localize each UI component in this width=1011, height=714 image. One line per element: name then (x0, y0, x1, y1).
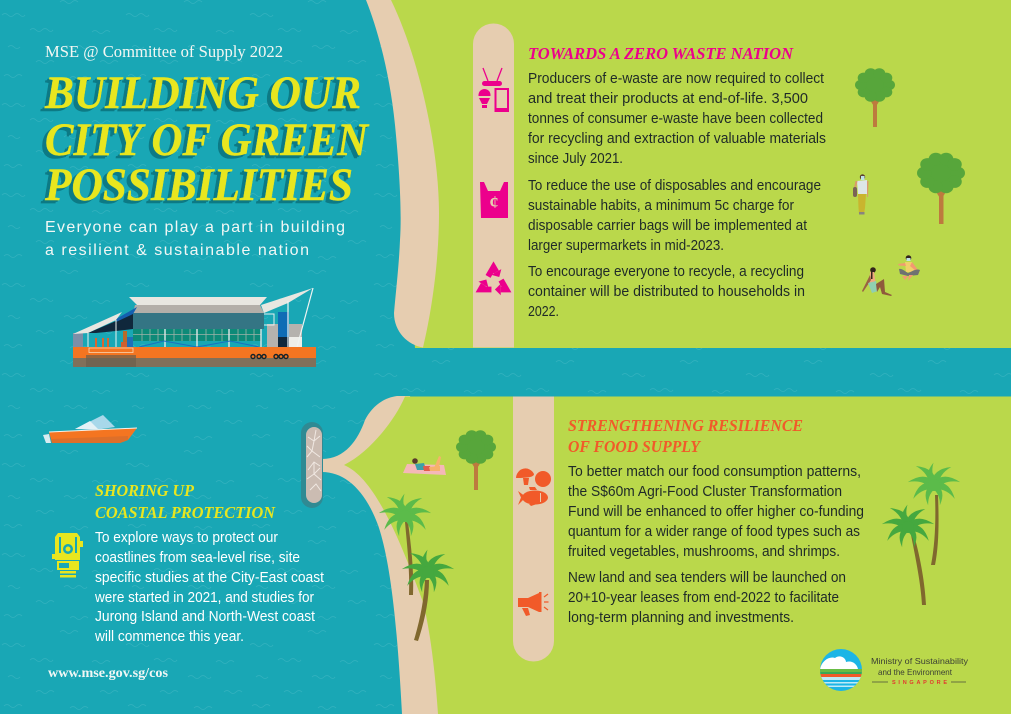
title: POSSIBILITIES (40, 162, 349, 214)
zero waste text: e-waste: since July 2021. (528, 150, 623, 167)
ministry logo: Ministry of Sustainability (871, 656, 969, 666)
bottom land (344, 396, 1011, 714)
title: CITY OF GREEN (45, 114, 370, 166)
illustration: palm tree right back (908, 460, 960, 565)
section: zero waste nation (477, 44, 965, 320)
zero waste text: recycling: To encourage everyone to recycle, a recycling (528, 263, 804, 280)
subtitle: Everyone can play a part in building (45, 219, 345, 236)
title: CITY OF GREEN (41, 117, 366, 169)
icon: megaphone (518, 592, 548, 616)
zero waste text: e-waste: tonnes of consumer e-waste have been collected (528, 110, 823, 127)
illustration: beach tree (456, 430, 496, 490)
icon: carrier bag with cent sign (480, 182, 508, 218)
title: BUILDING OUR (40, 70, 357, 122)
icon: mushroom, tomato and fish (516, 468, 551, 506)
icon: surveying instrument (52, 533, 83, 578)
subtitle (45, 219, 345, 259)
zero waste text: e-waste: Producers of e-waste are now required to collect (528, 70, 825, 87)
coastal protection text: will commence this year. (94, 628, 244, 645)
icon: carrier bag with cent sign: ¢ (490, 192, 498, 212)
top footpath (473, 23, 514, 347)
coastal protection heading: COASTAL PROTECTION (95, 503, 276, 522)
coastal protection text (94, 529, 325, 645)
coastal protection text: To explore ways to protect our (95, 529, 278, 546)
title: POSSIBILITIES (44, 159, 353, 211)
food supply text: funding: fruited vegetables, mushrooms, and shrimps. (568, 543, 840, 560)
ministry logo (820, 649, 969, 691)
zero waste heading: TOWARDS A ZERO WASTE NATION (528, 44, 794, 63)
coastal protection text: specific studies at the City-East coast (95, 569, 325, 586)
coastal protection heading (95, 481, 276, 522)
illustration: seated man (898, 255, 920, 281)
coastal protection text: were started in 2021, and studies for (94, 589, 314, 606)
food supply text: funding: the S$60m Agri-Food Cluster Transformation (568, 483, 842, 500)
zero waste text: carrier bags: disposable carrier bags will be implemented at (528, 217, 808, 234)
website link: www.mse.gov.sg/cos (48, 666, 169, 681)
zero waste text: e-waste: and treat their products at end-of-life. 3,500 (528, 90, 808, 107)
top land (385, 0, 1011, 348)
zero waste text: carrier bags: sustainable habits, a minimum 5c charge for (528, 197, 794, 214)
illustration: seated woman (862, 267, 892, 296)
boat (43, 415, 137, 443)
illustration: palm tree right front (882, 502, 934, 605)
bottom beach with breakwater spit (322, 396, 450, 714)
zero waste text: recycling: container will be distributed to households in (528, 283, 805, 300)
title: CITY OF GREEN (43, 116, 368, 168)
food supply text: tenders: long-term planning and investments. (568, 609, 794, 626)
title (40, 67, 370, 214)
food supply heading: STRENGTHENING RESILIENCE (568, 416, 803, 435)
floating building illustration (73, 288, 316, 367)
zero waste text: carrier bags: larger supermarkets in mid-2023. (528, 237, 724, 254)
food supply text: tenders: New land and sea tenders will be launched on (568, 569, 846, 586)
zero waste text: carrier bags (528, 177, 821, 254)
section: coastal protection (52, 481, 325, 645)
icon: e-waste devices (478, 68, 509, 112)
top beach (366, 0, 439, 348)
section: food supply resilience (379, 416, 960, 641)
food supply text: funding: Fund will be enhanced to offer higher co-funding (568, 503, 864, 520)
food supply text: tenders (568, 569, 846, 626)
food supply heading (568, 416, 803, 456)
food supply text: funding: To better match our food consumption patterns, (568, 463, 861, 480)
food supply text: funding (568, 463, 864, 560)
title: BUILDING OUR (42, 68, 359, 120)
ministry logo: and the Environment (878, 667, 953, 677)
title: BUILDING OUR (44, 67, 361, 119)
coastal protection heading: SHORING UP (95, 481, 195, 500)
zero waste text: recycling (528, 263, 805, 320)
illustration: palm tree left (379, 491, 431, 595)
ministry logo: SINGAPORE (892, 680, 947, 686)
coastal protection text: Jurong Island and North-West coast (95, 608, 316, 625)
event label: MSE @ Committee of Supply 2022 (45, 42, 283, 61)
zero waste text: e-waste (528, 70, 826, 167)
zero waste text: carrier bags: To reduce the use of disposables and encourage (528, 177, 821, 194)
subtitle: a resilient & sustainable nation (45, 242, 309, 259)
coastal protection text: coastlines from sea-level rise, site (95, 549, 300, 566)
illustration: tree (855, 68, 895, 127)
title: POSSIBILITIES (42, 160, 351, 212)
breakwater (301, 422, 323, 508)
food supply heading: OF FOOD SUPPLY (568, 437, 702, 456)
illustration: large tree (917, 153, 965, 224)
food supply text: tenders: 20+10-year leases from end-2022 to facilitate (568, 589, 839, 606)
illustration: palm tree front (402, 547, 454, 641)
icon: recycling symbol (477, 267, 509, 296)
bottom footpath (513, 396, 554, 662)
food supply text: funding: quantum for a wider range of food types such as (568, 523, 860, 540)
zero waste text: e-waste: for recycling and extraction of valuable materials (528, 130, 826, 147)
illustration: standing person with bag (853, 174, 868, 214)
illustration: sunbather on towel (403, 456, 446, 475)
zero waste text: recycling: 2022. (528, 303, 559, 320)
